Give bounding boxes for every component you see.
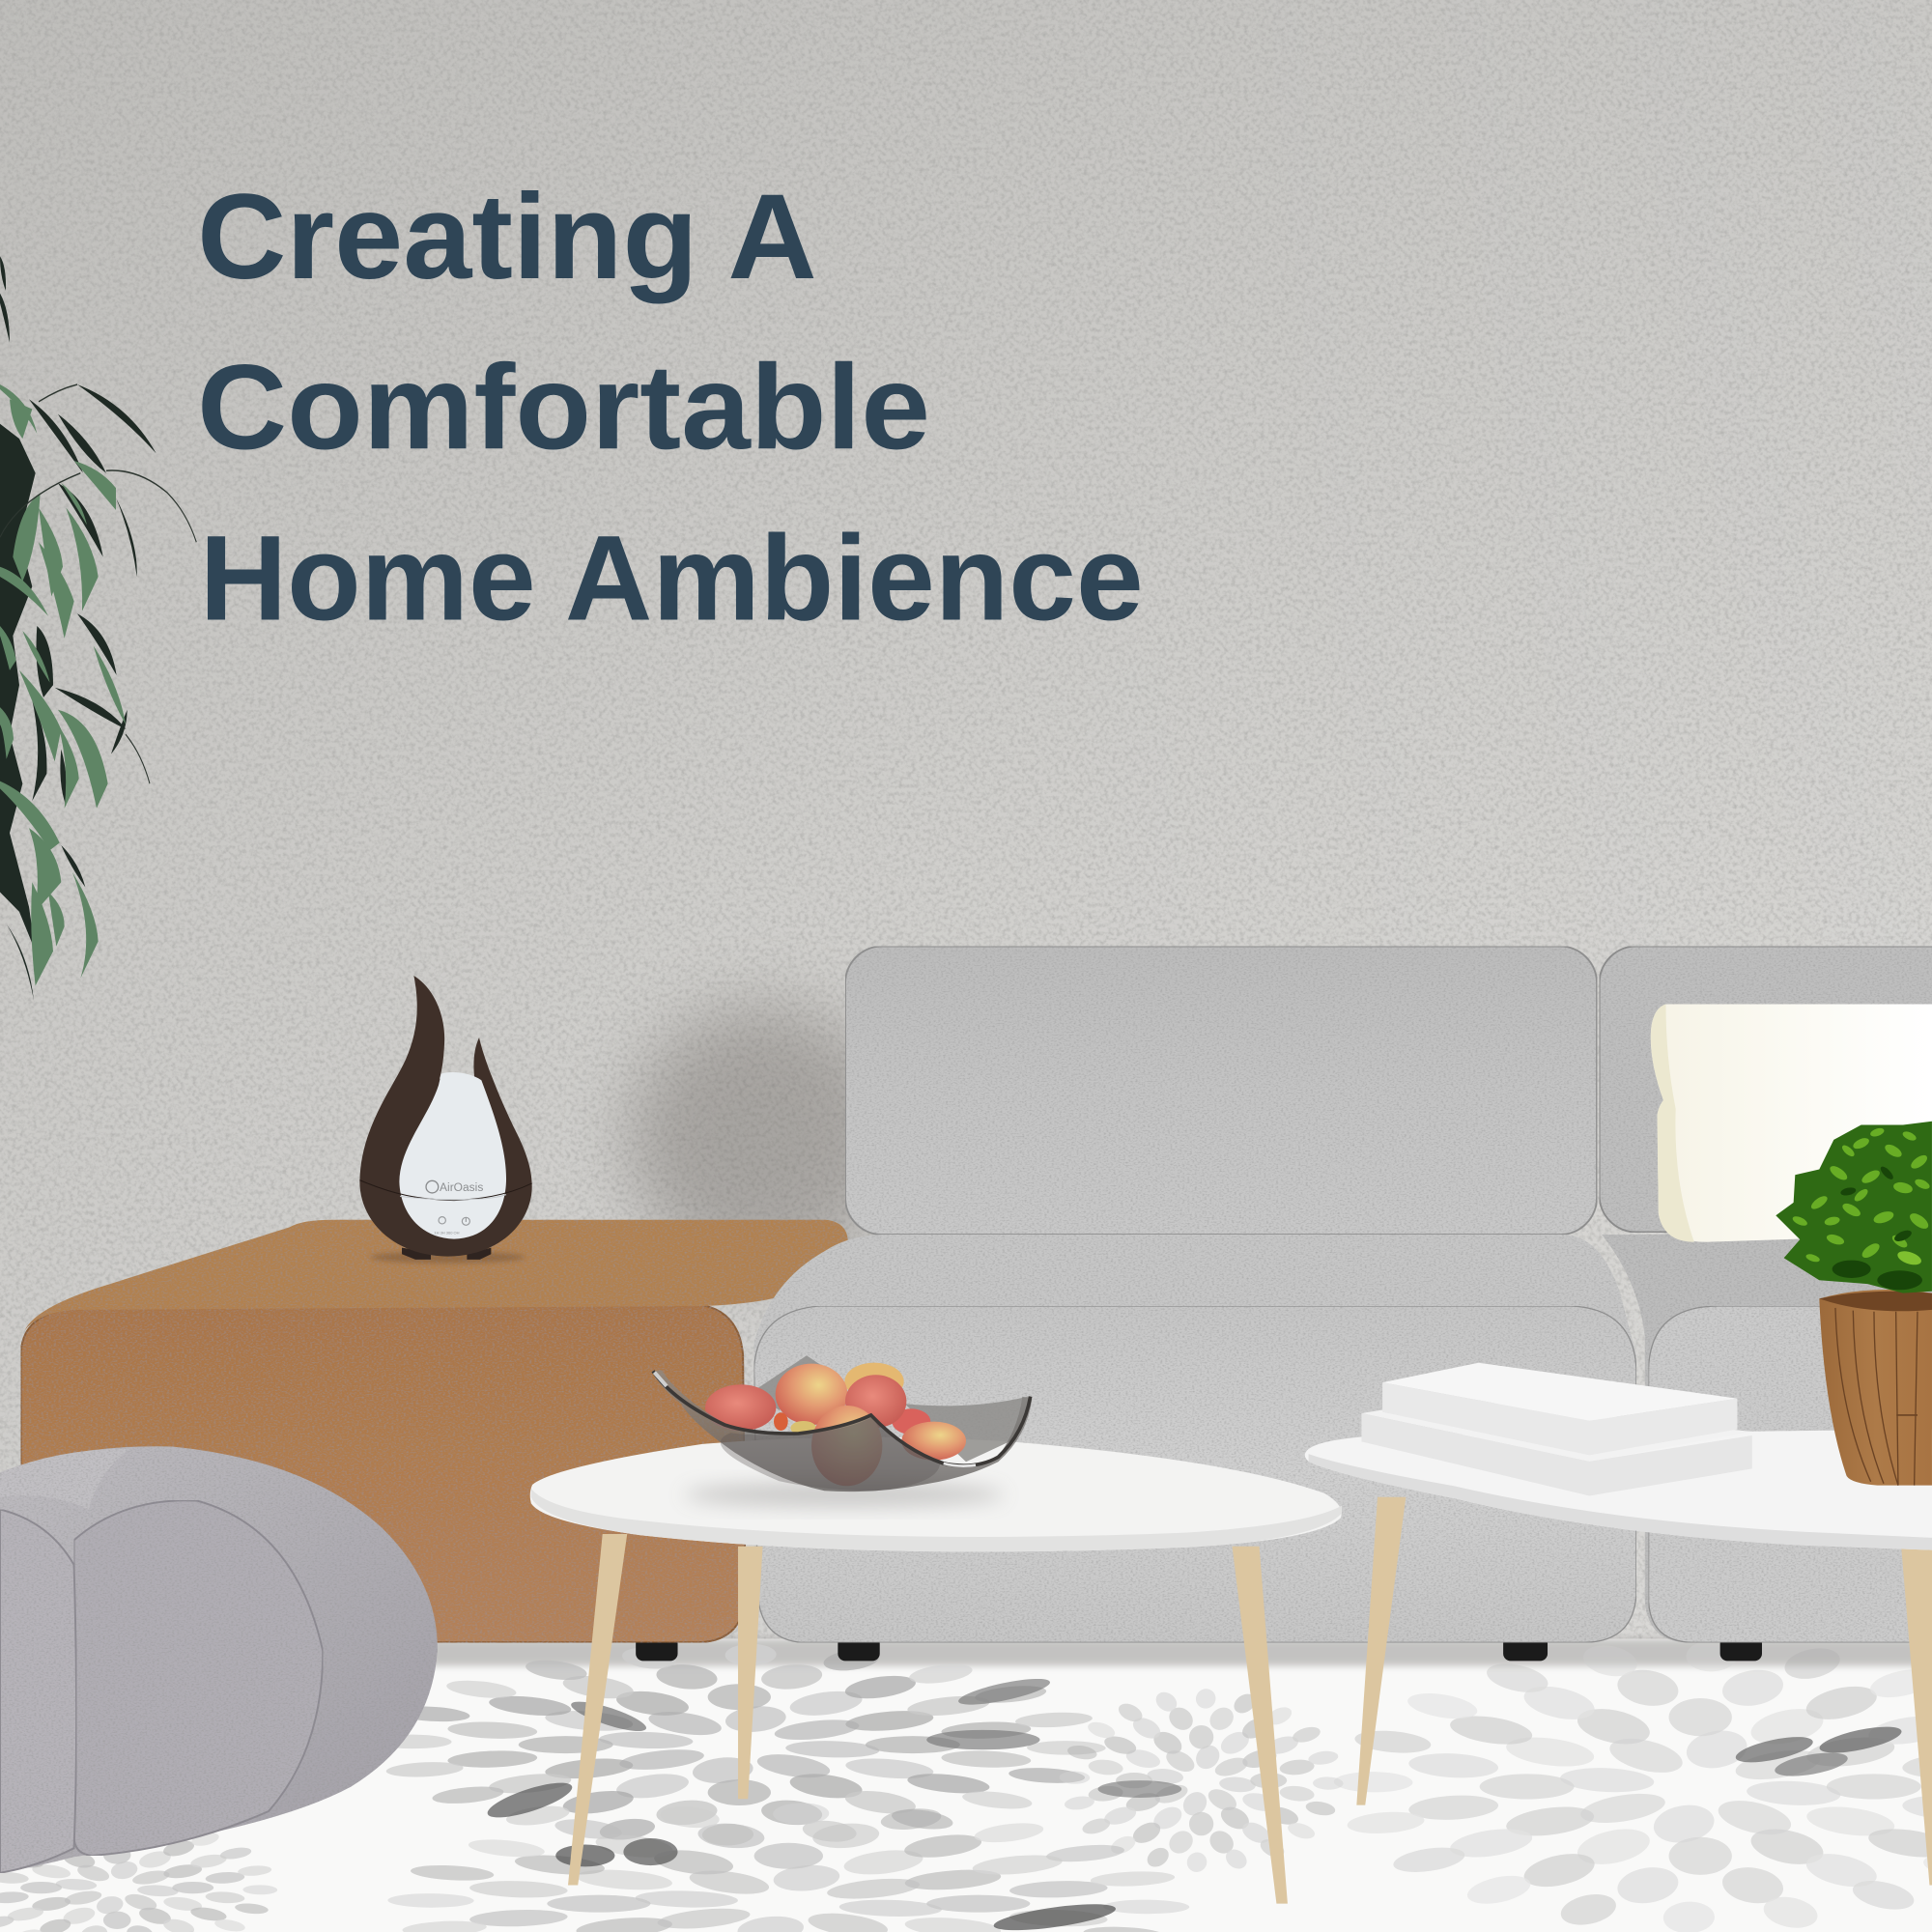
pouf body <box>0 1446 438 1873</box>
bowl front glass <box>652 1370 1032 1492</box>
humidifier shadow <box>370 1252 525 1264</box>
seat left top <box>754 1235 1636 1380</box>
thin leaf tips <box>0 384 196 783</box>
controls <box>434 1217 469 1235</box>
foliage <box>1776 1122 1932 1293</box>
apples <box>705 1363 966 1486</box>
table 2 (right) <box>1305 1430 1932 1886</box>
dark leaves <box>0 256 156 1001</box>
lower book <box>1361 1399 1752 1495</box>
grey sofa <box>754 947 1932 1642</box>
table 1 (centre) <box>530 1437 1342 1904</box>
stacked white books <box>1361 1363 1752 1495</box>
pouf top lobes <box>0 1449 129 1509</box>
seat left front <box>754 1306 1636 1642</box>
cream cushion <box>1651 1005 1932 1242</box>
bowl rim <box>653 1371 1031 1465</box>
logo: AirOasis <box>440 1180 483 1194</box>
pouf <box>0 1446 438 1873</box>
white diffuser <box>399 1072 506 1239</box>
rug flower pattern <box>0 1639 1932 1932</box>
ottoman front <box>21 1303 746 1642</box>
table top <box>530 1437 1342 1551</box>
feet <box>402 1248 491 1260</box>
rug <box>0 1638 1932 1932</box>
right table top <box>1305 1430 1932 1550</box>
back cushion right <box>1600 947 1932 1233</box>
right table legs <box>1356 1497 1932 1886</box>
wood shell <box>359 976 532 1257</box>
humidifier <box>359 976 532 1264</box>
potted plant <box>1776 1122 1932 1486</box>
plant leaves <box>0 256 196 1001</box>
controls: 1H 3H 360 OH <box>434 1230 460 1235</box>
back cushion left <box>845 947 1597 1235</box>
tan ottoman <box>21 1220 848 1642</box>
seat right front <box>1649 1306 1932 1642</box>
title: Home Ambience <box>200 512 1144 646</box>
fruit bowl <box>652 1355 1032 1492</box>
pot <box>1819 1290 1932 1486</box>
seat right <box>1602 1235 1932 1642</box>
bowl back <box>753 1355 1031 1462</box>
seam <box>359 1180 532 1201</box>
ottoman top <box>25 1220 848 1331</box>
pouf front lobe <box>74 1500 323 1856</box>
title <box>197 170 1144 646</box>
green leaves <box>0 384 126 985</box>
sofa legs <box>636 1636 1762 1661</box>
upper book <box>1382 1363 1737 1455</box>
pouf left lobe <box>0 1509 76 1873</box>
title: Comfortable <box>197 340 930 474</box>
table legs <box>568 1534 1288 1904</box>
title: Creating A <box>197 170 817 304</box>
